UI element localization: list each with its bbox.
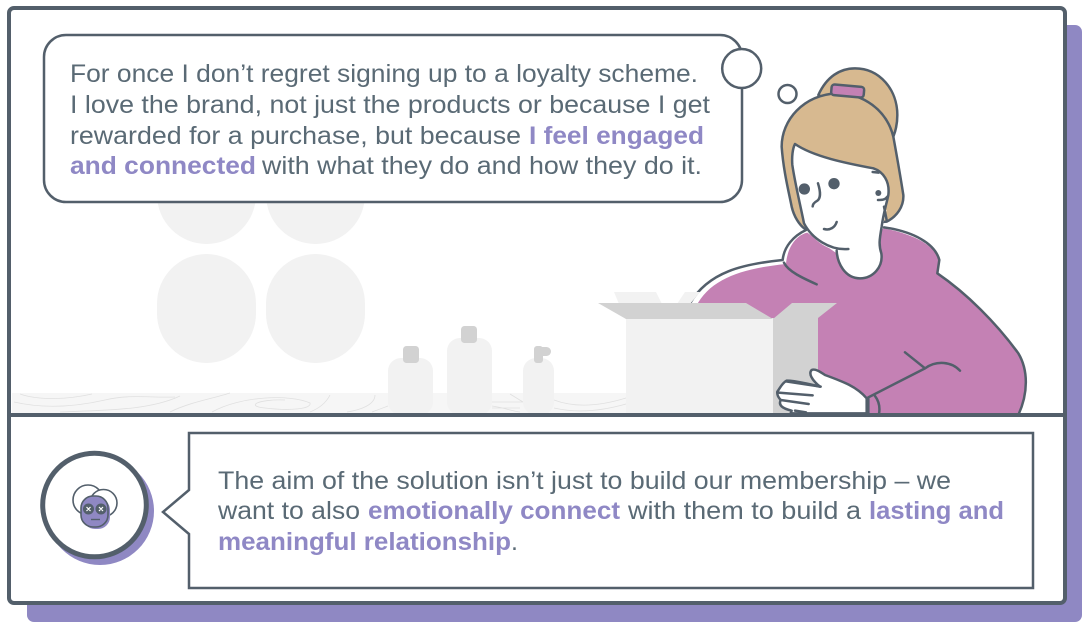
icon: woman with face mask (73, 485, 117, 529)
quote text: and connected (70, 152, 256, 180)
sweater outline (690, 227, 1026, 415)
open box (598, 292, 837, 413)
quote text (70, 60, 710, 180)
statement text: meaningful relationship (218, 528, 511, 556)
thought circle small (778, 85, 796, 103)
thought circle large (722, 49, 761, 88)
eyes and ear dot (799, 178, 881, 196)
face (792, 144, 889, 278)
statement text: want to also (217, 497, 360, 525)
scene divider (9, 413, 1065, 417)
quote text: I love the brand, not just the products or because I get (70, 91, 710, 119)
sweater (693, 228, 1025, 415)
neck (827, 210, 887, 278)
hair band (831, 84, 864, 98)
avatar badge (43, 453, 154, 565)
quote text: I feel engaged (529, 122, 704, 150)
quote text: For once I don’t regret signing up to a loyalty scheme. (70, 60, 698, 88)
statement text (217, 467, 1004, 556)
hair (782, 93, 903, 229)
face outline (792, 144, 889, 278)
statement text: lasting and (869, 497, 1004, 525)
quote text: with what they do and how they do it. (261, 152, 702, 180)
woman illustration (690, 68, 1026, 415)
statement text: The aim of the solution isn’t just to build our membership – we (218, 467, 951, 495)
quote text: rewarded for a purchase, but because (70, 122, 521, 150)
nose and smile (813, 183, 837, 229)
product bottle 3 with pump (523, 346, 554, 415)
ponytail (818, 68, 897, 137)
statement text: with them to build a (627, 497, 861, 525)
speech box with pointer (163, 433, 1033, 588)
statement text: emotionally connect (368, 497, 621, 525)
thought bubble (44, 35, 796, 202)
background wall ovals (157, 135, 365, 363)
wooden table top (12, 393, 632, 413)
statement text: . (511, 528, 518, 556)
product bottle 1 (388, 346, 433, 415)
product bottle 2 (447, 326, 492, 415)
hand and arm (777, 352, 960, 414)
